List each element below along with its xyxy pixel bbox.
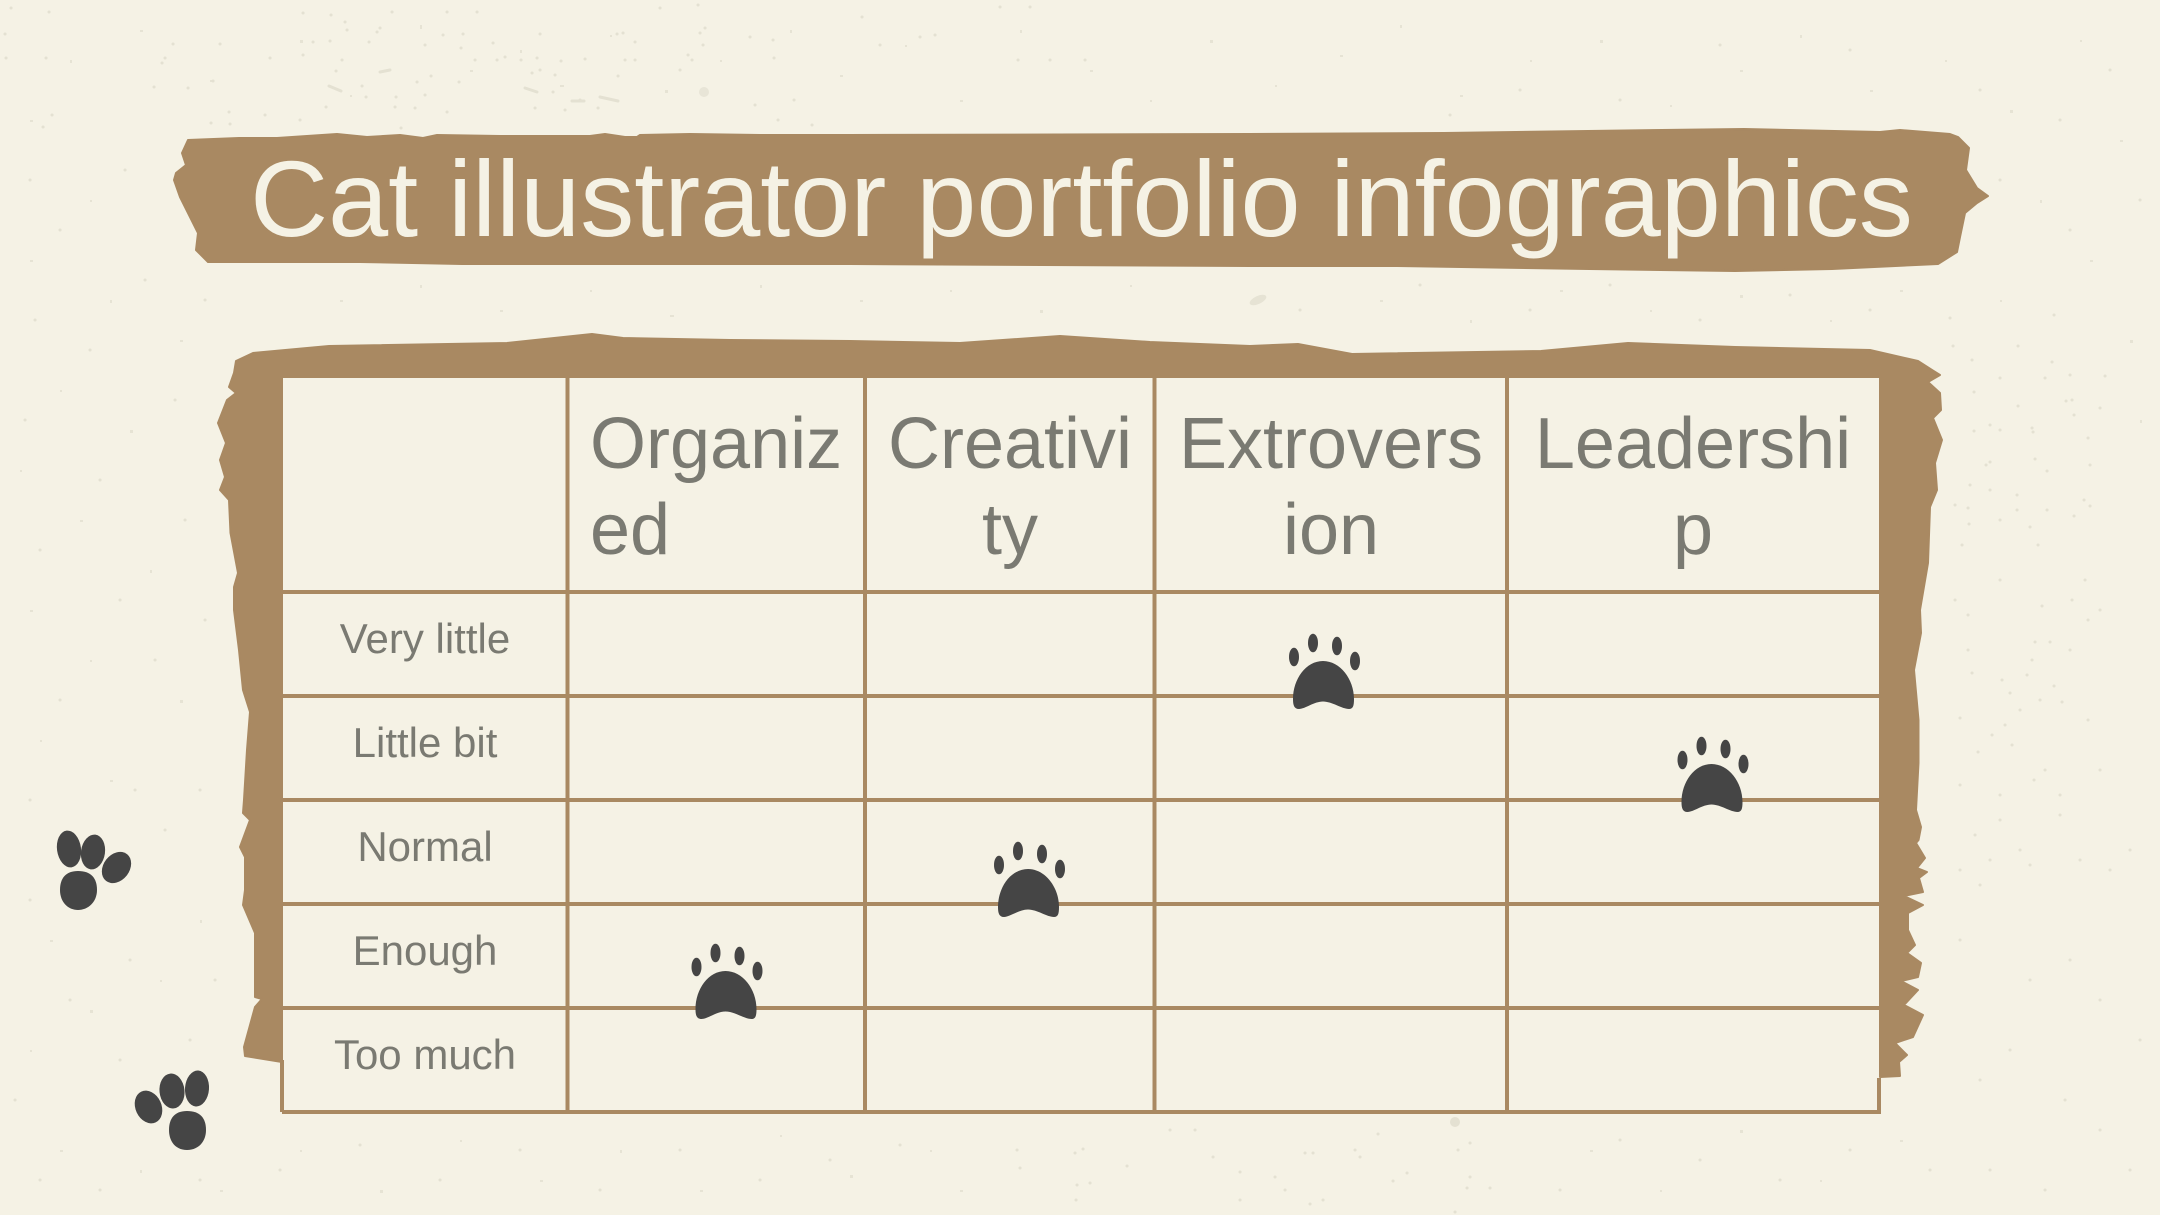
header: Creativity: Creativi xyxy=(888,404,1132,484)
label: Enough: Enough xyxy=(353,927,497,974)
header: Organized: Organiz xyxy=(590,404,842,484)
label: Very little: Very little xyxy=(340,615,510,662)
header: Extroversion: Extrovers xyxy=(1179,404,1483,484)
header: Leadership: p xyxy=(1673,490,1713,570)
row labels xyxy=(334,615,516,1078)
marker paw: Organized, Enough xyxy=(692,944,762,1019)
title banner xyxy=(174,129,1988,271)
header: Leadership: Leadershi xyxy=(1535,404,1851,484)
label: Normal: Normal xyxy=(357,823,493,870)
table backing: torn brown paper xyxy=(218,334,1942,1077)
header: Organized: ed xyxy=(590,490,670,570)
paw print: left decoration xyxy=(55,829,137,910)
background speck xyxy=(699,87,709,97)
title text: Cat illustrator portfolio infographics xyxy=(250,138,1913,259)
paw print: lower left decoration xyxy=(130,1070,210,1150)
label: Too much: Too much xyxy=(334,1031,516,1078)
column headers xyxy=(590,404,1851,570)
header: Extroversion: ion xyxy=(1283,490,1379,570)
background speck xyxy=(1450,1117,1460,1127)
marker paw: Extroversion, Very little xyxy=(1289,634,1360,709)
background speck xyxy=(1248,293,1268,307)
label: Little bit: Little bit xyxy=(353,719,498,766)
table grid xyxy=(282,378,1879,1112)
header: Creativity: ty xyxy=(982,490,1038,570)
marker paw: Creativity, Normal xyxy=(994,842,1065,917)
marker paw: Leadership, Little bit xyxy=(1678,737,1748,812)
